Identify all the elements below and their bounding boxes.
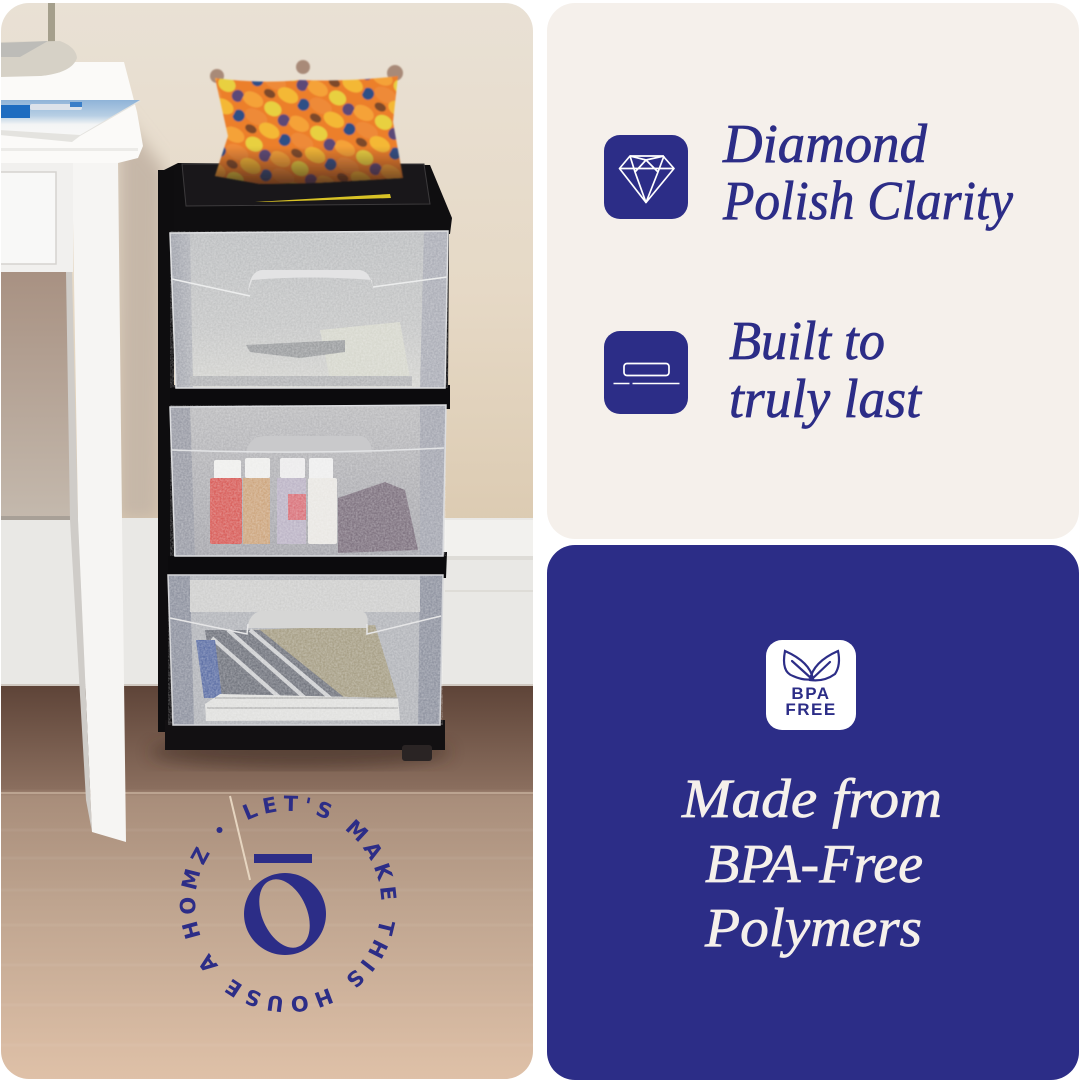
panel: BPA free <box>547 545 1079 1080</box>
handle <box>246 436 372 453</box>
heading: Made from <box>681 768 942 829</box>
black frame <box>158 163 452 761</box>
handle <box>247 611 368 628</box>
heading: Diamond <box>722 113 927 174</box>
feature: diamond clarity <box>604 113 1014 231</box>
lamp <box>0 3 77 77</box>
icon: BPA free badge: FREE <box>785 700 837 719</box>
ring mark <box>244 873 326 955</box>
dark craft items <box>338 482 418 553</box>
recessed lid <box>182 164 430 206</box>
drawer 3 <box>168 575 443 725</box>
tan bottle <box>245 458 270 478</box>
notebook and pen <box>0 100 141 142</box>
caster wheel <box>402 745 432 761</box>
dot <box>216 827 222 833</box>
wood floor <box>0 686 534 1080</box>
heading: BPA-Free <box>705 833 923 894</box>
wall <box>0 0 534 525</box>
striped papers <box>196 630 345 698</box>
drawer 2 <box>170 405 446 556</box>
storage cabinet <box>158 60 452 761</box>
tan folder <box>250 625 398 700</box>
baseboard <box>0 516 534 687</box>
icon: diamond <box>604 135 688 219</box>
circular tagline: LET'S MAKE THIS HOUSE A HOMZ <box>180 796 396 1012</box>
icon: slim drawer <box>604 331 688 414</box>
handle <box>248 270 373 292</box>
red bottle <box>214 460 241 480</box>
lavender bottle <box>280 458 305 478</box>
table top <box>0 62 143 163</box>
icon: BPA free badge: BPA <box>791 684 831 703</box>
icon: BPA free badge <box>766 640 856 730</box>
floor shadow <box>150 736 450 768</box>
feature: durability <box>604 310 923 429</box>
table apron <box>0 160 73 272</box>
heading: Polymers <box>704 897 922 958</box>
heading: Polish Clarity <box>722 170 1014 231</box>
table leg <box>72 160 126 842</box>
white side table <box>0 3 143 842</box>
white bottle <box>309 458 333 480</box>
white magazines <box>205 694 400 721</box>
heading: truly last <box>729 368 923 429</box>
panel: product photo <box>1 3 533 1079</box>
drawer 1 <box>170 231 448 388</box>
pencil <box>255 194 391 202</box>
macron bar <box>254 854 312 863</box>
decorative pillow <box>210 60 403 184</box>
paint bottles <box>210 458 337 544</box>
panel: features <box>547 3 1079 539</box>
wall shadow behind table <box>118 110 165 520</box>
logo badge <box>180 796 396 1012</box>
room seen under table <box>0 272 70 518</box>
heading: Built to <box>729 310 885 371</box>
